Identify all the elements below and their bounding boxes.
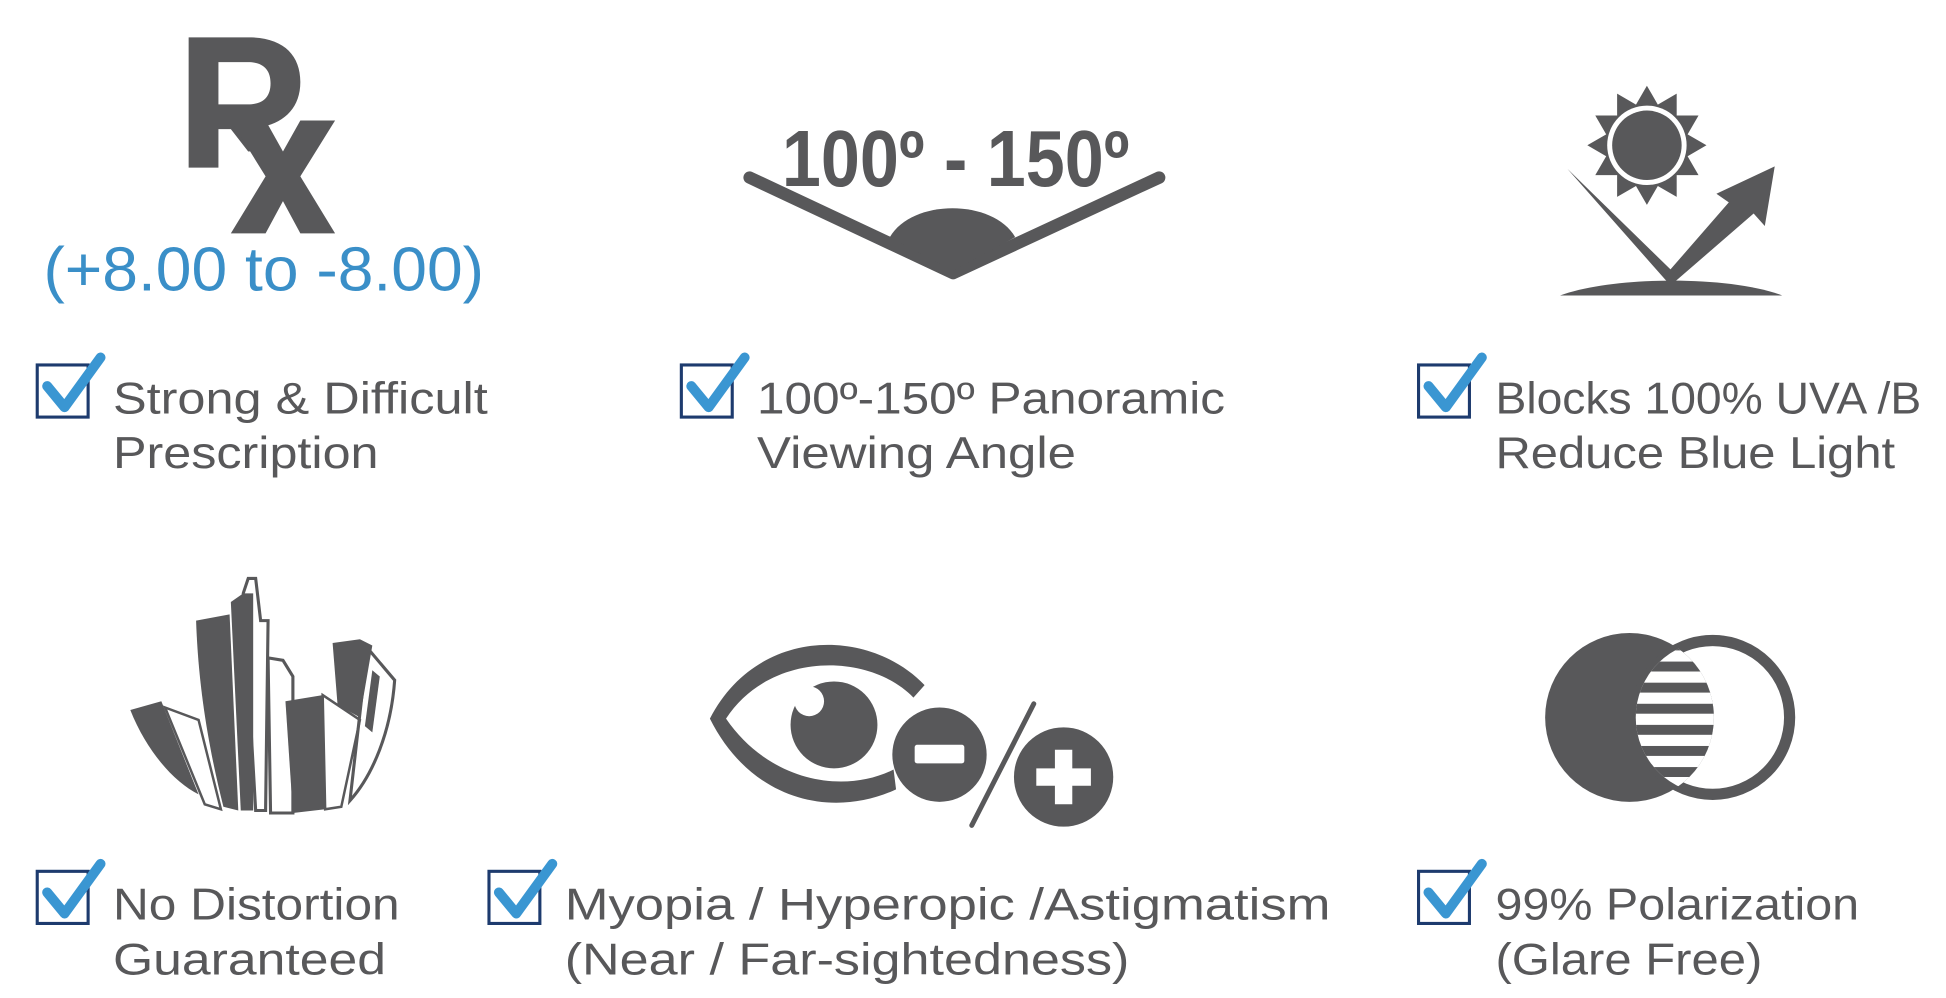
checkbox <box>37 358 101 417</box>
label: Myopia / Hyperopic /Astigmatism <box>565 881 1330 930</box>
label: Strong & Difficult <box>113 374 488 423</box>
icon: angle <box>750 114 1159 273</box>
icon: city buildings <box>130 578 395 813</box>
checkbox <box>1419 864 1482 923</box>
icon: eye with minus and plus <box>710 645 1113 827</box>
label: (Glare Free) <box>1495 935 1762 984</box>
icon: sun with reflected arrow <box>1560 86 1782 295</box>
label: Guaranteed <box>113 935 386 984</box>
panel: UV protection <box>1419 86 1921 478</box>
label <box>565 881 1330 984</box>
checkbox <box>37 864 101 923</box>
label <box>1495 374 1921 478</box>
label <box>113 881 400 984</box>
panel: no distortion <box>37 578 400 984</box>
label: (Near / Far-sightedness) <box>565 935 1129 984</box>
label: Prescription <box>113 429 379 478</box>
panel: viewing angle <box>681 114 1225 478</box>
text: power range: (+8.00 to -8.00) <box>43 236 484 305</box>
panel: polarization <box>1419 621 1859 984</box>
label: Reduce Blue Light <box>1495 429 1896 478</box>
label: No Distortion <box>113 881 400 930</box>
label <box>757 374 1225 478</box>
checkbox <box>1419 358 1482 417</box>
label <box>113 374 488 478</box>
checkbox <box>681 358 745 417</box>
label: 100º-150º Panoramic <box>757 374 1225 423</box>
icon: Rx <box>189 37 335 233</box>
checkbox <box>489 864 552 923</box>
label: Viewing Angle <box>757 429 1076 478</box>
panel: prescription <box>37 37 488 478</box>
label: 99% Polarization <box>1495 881 1859 930</box>
label <box>1495 881 1859 984</box>
icon: angle: 100º - 150º <box>782 114 1129 203</box>
icon: polarized circles <box>1545 633 1796 802</box>
label: Blocks 100% UVA /B <box>1495 374 1921 423</box>
panel: myopia / hyperopia <box>489 645 1330 984</box>
